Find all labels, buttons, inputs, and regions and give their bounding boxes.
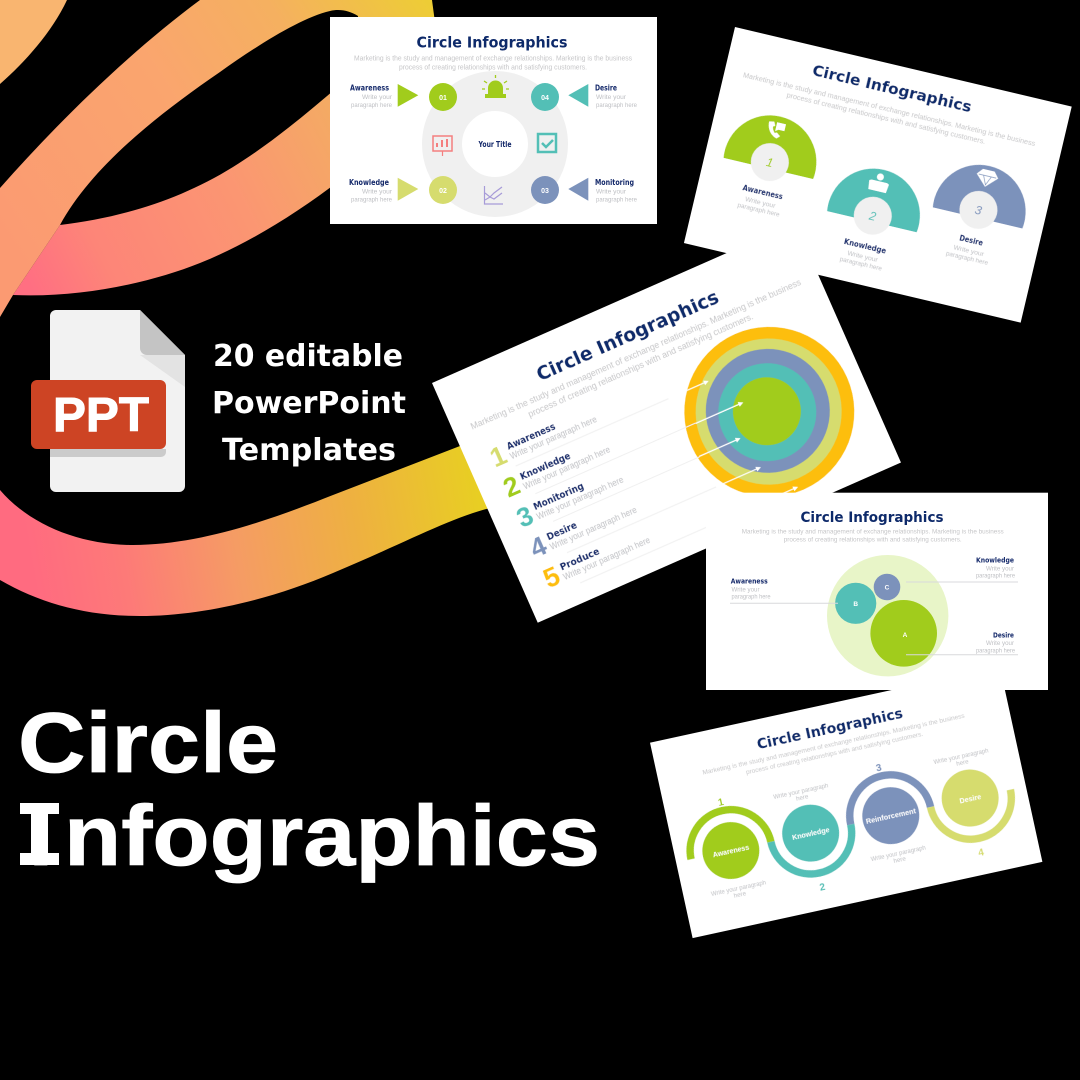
title: Circle Infographics: Circle [18, 696, 278, 791]
title: Circle Infographics: I [29, 789, 53, 884]
semicircle: Knowledge: Write your [847, 250, 879, 264]
semicircle: Desire: Desire [958, 233, 984, 248]
text block: 20 editable PowerPoint Templates [212, 339, 406, 468]
circle: Reinforcement: here [893, 855, 907, 865]
panel: slide 1 ring with four stages: Your Title [478, 140, 512, 149]
circle: Awareness: 1 [717, 797, 725, 809]
circle: Reinforcement [851, 757, 929, 870]
list item 2: Write your paragraph here [522, 444, 612, 491]
panel: slide 1 ring with four stages: paragraph here [351, 102, 392, 109]
semicircle: Knowledge [816, 159, 929, 279]
circle: Desire: 4 [977, 847, 985, 859]
panel: slide 5 wave of circles: Circle Infographics [756, 706, 905, 753]
text block: 20 editable PowerPoint Templates: PowerPoint [212, 386, 406, 421]
icon: PPT file: PPT [53, 389, 149, 442]
panel: slide 5 wave of circles [650, 666, 1042, 938]
label: Desire [976, 632, 1016, 654]
panel: slide 1 ring with four stages: Circle Infographics [416, 34, 568, 52]
label: Awareness: Write your [732, 588, 760, 594]
panel: slide 1 ring with four stages: Write your [596, 94, 627, 101]
circle: Awareness: Awareness [712, 843, 750, 859]
list item 1: Awareness [505, 422, 557, 453]
list item 5 [539, 521, 654, 594]
panel: slide 4 nested circles [706, 493, 1048, 690]
label: Desire: Write your [986, 641, 1014, 647]
semicircle: Awareness: Write your [744, 196, 777, 210]
semicircle: Desire: 3 [973, 203, 984, 218]
chart: nested circles: C [885, 584, 890, 592]
circle: Desire: Desire [959, 792, 982, 805]
panel: slide 1 ring with four stages: Write your [596, 188, 627, 196]
semicircle: Awareness [712, 106, 826, 224]
panel: slide 1 ring with four stages: Knowledge [349, 178, 389, 187]
circle: Desire: Write your paragraph [933, 747, 990, 766]
label: Desire: Desire [993, 632, 1014, 640]
semicircle: Awareness: paragraph here [737, 202, 781, 219]
panel: slide 4 nested circles: Circle Infographics [800, 510, 944, 526]
panel: slide 1 ring with four stages: Marketing is the study and management of exchange relationships. Marketing is the business [354, 56, 632, 62]
list item 5: 5 [539, 561, 564, 594]
panel: slide 1 ring with four stages: process of creating relationships with and satisfying customers. [399, 64, 587, 72]
panel: slide 2 three semicircles: process of creating relationships with and satisfying customers. [786, 90, 986, 146]
list item 4: 4 [525, 530, 551, 564]
label: Awareness [731, 578, 771, 600]
chart: concentric circles [657, 300, 881, 524]
list item 5: Produce [559, 546, 602, 573]
semicircle: Desire [922, 155, 1035, 273]
panel: slide 1 ring with four stages [330, 17, 657, 224]
circle: Knowledge: 2 [819, 882, 827, 894]
panel: slide 1 ring with four stages: 01 [439, 95, 447, 102]
list item 1: 1 [485, 440, 511, 473]
semicircle: Desire: paragraph here [945, 250, 989, 267]
panel: slide 3 concentric circles: Marketing is the study and management of exchange relationships. Marketing is the business [469, 277, 803, 432]
list item 2 [499, 431, 614, 503]
chart: nested circles [827, 555, 948, 676]
icon: check box [538, 134, 556, 152]
circle: Reinforcement: Write your paragraph [870, 844, 927, 863]
icon: siren [482, 75, 509, 98]
list item 3: 3 [512, 500, 538, 534]
panel: slide 1 ring with four stages: Awareness [350, 84, 389, 92]
title: Circle Infographics [18, 696, 600, 884]
list item 1 [485, 400, 600, 473]
ribbon: gradient swoosh [0, 0, 490, 616]
semicircle: Knowledge: paragraph here [839, 256, 883, 273]
icon: PPT file [31, 310, 185, 492]
panel: slide 1 ring with four stages: 02 [439, 188, 447, 195]
circle: Awareness: Write your paragraph [711, 879, 767, 898]
list item 2: Knowledge [519, 451, 573, 483]
panel: slide 3 concentric circles [432, 223, 901, 623]
text block: 20 editable PowerPoint Templates: Templates [222, 433, 396, 468]
panel: slide 4 nested circles: Marketing is the study and management of exchange relationships. Marketing is the business [742, 528, 1004, 536]
circle: Knowledge: Knowledge [791, 825, 830, 842]
semicircle: Awareness: 1 [765, 155, 775, 170]
circle: Knowledge [773, 782, 852, 899]
chart: nested circles: B [853, 601, 858, 608]
list item 3 [512, 461, 627, 534]
panel: slide 2 three semicircles: Circle Infographics [811, 61, 973, 116]
list item 3: Monitoring [532, 481, 586, 513]
label: Knowledge: paragraph here [976, 574, 1016, 580]
list item 2: 2 [499, 470, 525, 503]
panel: slide 1 ring with four stages: paragraph here [351, 196, 392, 204]
panel: slide 2 three semicircles: Marketing is the study and management of exchange relationships. Marketing is the business [742, 70, 1036, 148]
semicircle: Desire: Write your [953, 244, 985, 258]
icon: presentation board [433, 136, 452, 156]
circle: Awareness [691, 792, 769, 904]
panel: slide 3 concentric circles: process of creating relationships with and satisfying customers. [527, 311, 755, 419]
circle: Desire: here [956, 758, 970, 768]
circle: Reinforcement: 3 [875, 762, 883, 774]
semicircle: Knowledge: 2 [867, 208, 878, 224]
list item 1: Write your paragraph here [508, 414, 598, 461]
label: Awareness: Awareness [731, 578, 768, 586]
label: Knowledge: Knowledge [976, 556, 1014, 564]
panel: slide 1 ring with four stages: Monitoring [595, 178, 634, 187]
chart: nested circles: A [903, 632, 908, 639]
panel: slide 1 ring with four stages: Desire [595, 84, 617, 92]
panel: slide 2 three semicircles [684, 27, 1072, 323]
label: Awareness: paragraph here [732, 594, 771, 600]
list item 5: Write your paragraph here [562, 535, 652, 582]
panel: slide 1 ring with four stages: paragraph here [596, 102, 637, 109]
panel: slide 1 ring with four stages: 04 [541, 95, 549, 102]
panel: slide 3 concentric circles: Circle Infographics [533, 286, 722, 386]
list item 4: Write your paragraph here [548, 505, 638, 552]
circle: Knowledge: here [795, 793, 810, 803]
list item 4 [525, 491, 640, 564]
circle: Reinforcement: Reinforcement [865, 806, 917, 826]
circle: Awareness: here [733, 890, 747, 900]
semicircle: Knowledge: Knowledge [843, 237, 887, 256]
list item 4: Desire [545, 520, 579, 543]
panel: slide 1 ring with four stages: Write your [362, 188, 393, 196]
icon: line chart [484, 186, 503, 204]
chart: wave arcs [682, 750, 1019, 899]
list item 3: Write your paragraph here [535, 475, 625, 522]
panel: slide 1 ring with four stages: paragraph here [596, 196, 637, 204]
circle: Desire [933, 747, 1011, 864]
panel: slide 5 wave of circles: process of creating relationships with and satisfying customers. [745, 731, 924, 776]
label: Desire: paragraph here [976, 648, 1016, 654]
panel: slide 5 wave of circles: Marketing is the study and management of exchange relationships. Marketing is the business [702, 713, 966, 777]
text block: 20 editable PowerPoint Templates: 20 editable [213, 339, 403, 374]
circle: Knowledge: Write your paragraph [773, 782, 830, 801]
panel: slide 4 nested circles: process of creating relationships with and satisfying customers. [784, 536, 962, 544]
label: Knowledge: Write your [986, 566, 1014, 572]
title: Circle Infographics: nfographics [64, 789, 600, 884]
semicircle: Awareness: Awareness [742, 183, 784, 202]
label: Knowledge [976, 556, 1016, 580]
arrows: leader lines [516, 366, 796, 588]
panel: slide 1 ring with four stages: 03 [541, 188, 549, 195]
panel: slide 1 ring with four stages: Write your [362, 94, 393, 101]
